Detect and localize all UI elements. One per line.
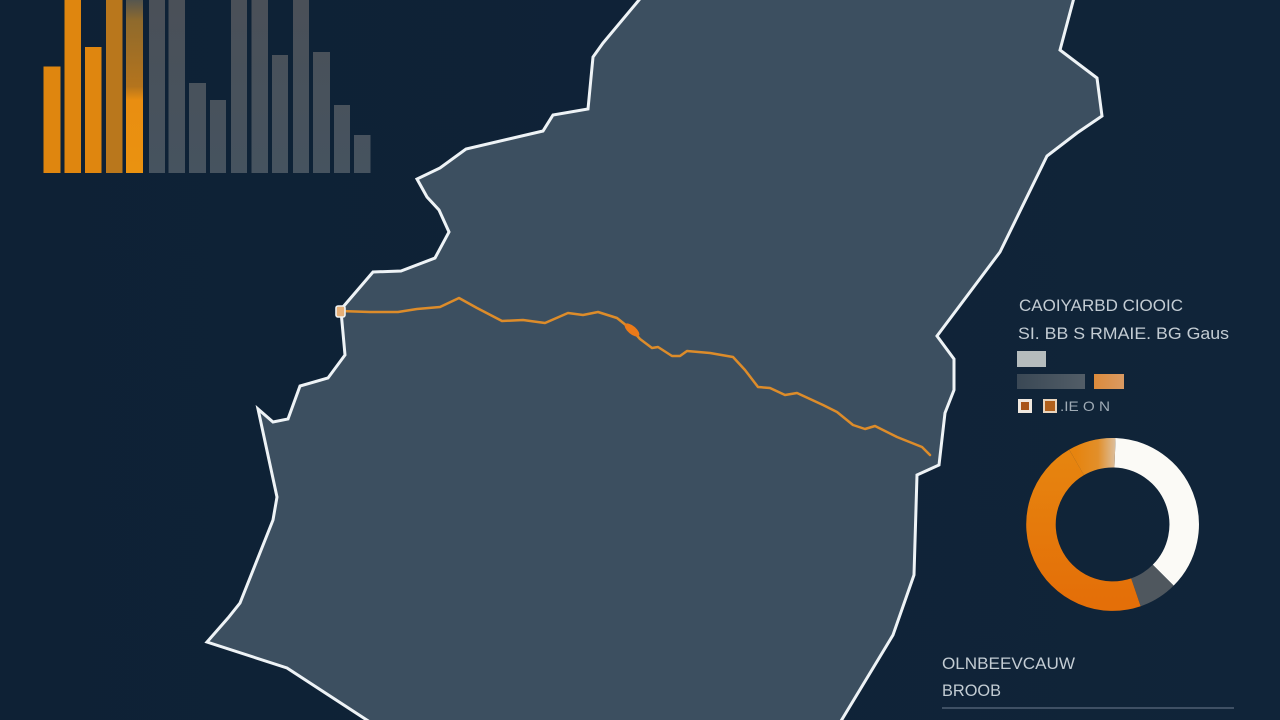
orange bars <box>44 0 143 173</box>
legend swatch: orange <box>1094 374 1124 389</box>
footer subtitle: BROOB <box>942 681 1001 700</box>
donut segment: gray <box>1136 575 1163 592</box>
legend panel <box>1017 296 1229 414</box>
footer note <box>942 654 1234 709</box>
legend marker one <box>1018 399 1032 413</box>
legend marker label: .IE O N <box>1060 398 1110 414</box>
route start node <box>336 306 345 317</box>
donut segment: orange <box>1041 462 1136 596</box>
donut segment: white <box>1115 453 1184 575</box>
route highlight <box>623 321 641 339</box>
legend swatch: gray <box>1017 374 1085 389</box>
legend swatch: light <box>1017 351 1046 367</box>
route path <box>340 298 930 455</box>
donut chart <box>1041 453 1184 596</box>
route line <box>336 298 930 455</box>
legend marker two <box>1043 399 1057 413</box>
legend subheading: SI. BB S RMAIE. BG Gaus <box>1018 324 1229 343</box>
legend heading: CAOIYARBD CIOOIC <box>1019 296 1183 315</box>
donut segment: orange fade <box>1077 453 1115 462</box>
map region <box>207 0 1102 720</box>
gray bars <box>149 0 370 173</box>
footer rule <box>942 707 1234 709</box>
bar chart <box>44 0 370 173</box>
footer title: OLNBEEVCAUW <box>942 654 1075 673</box>
